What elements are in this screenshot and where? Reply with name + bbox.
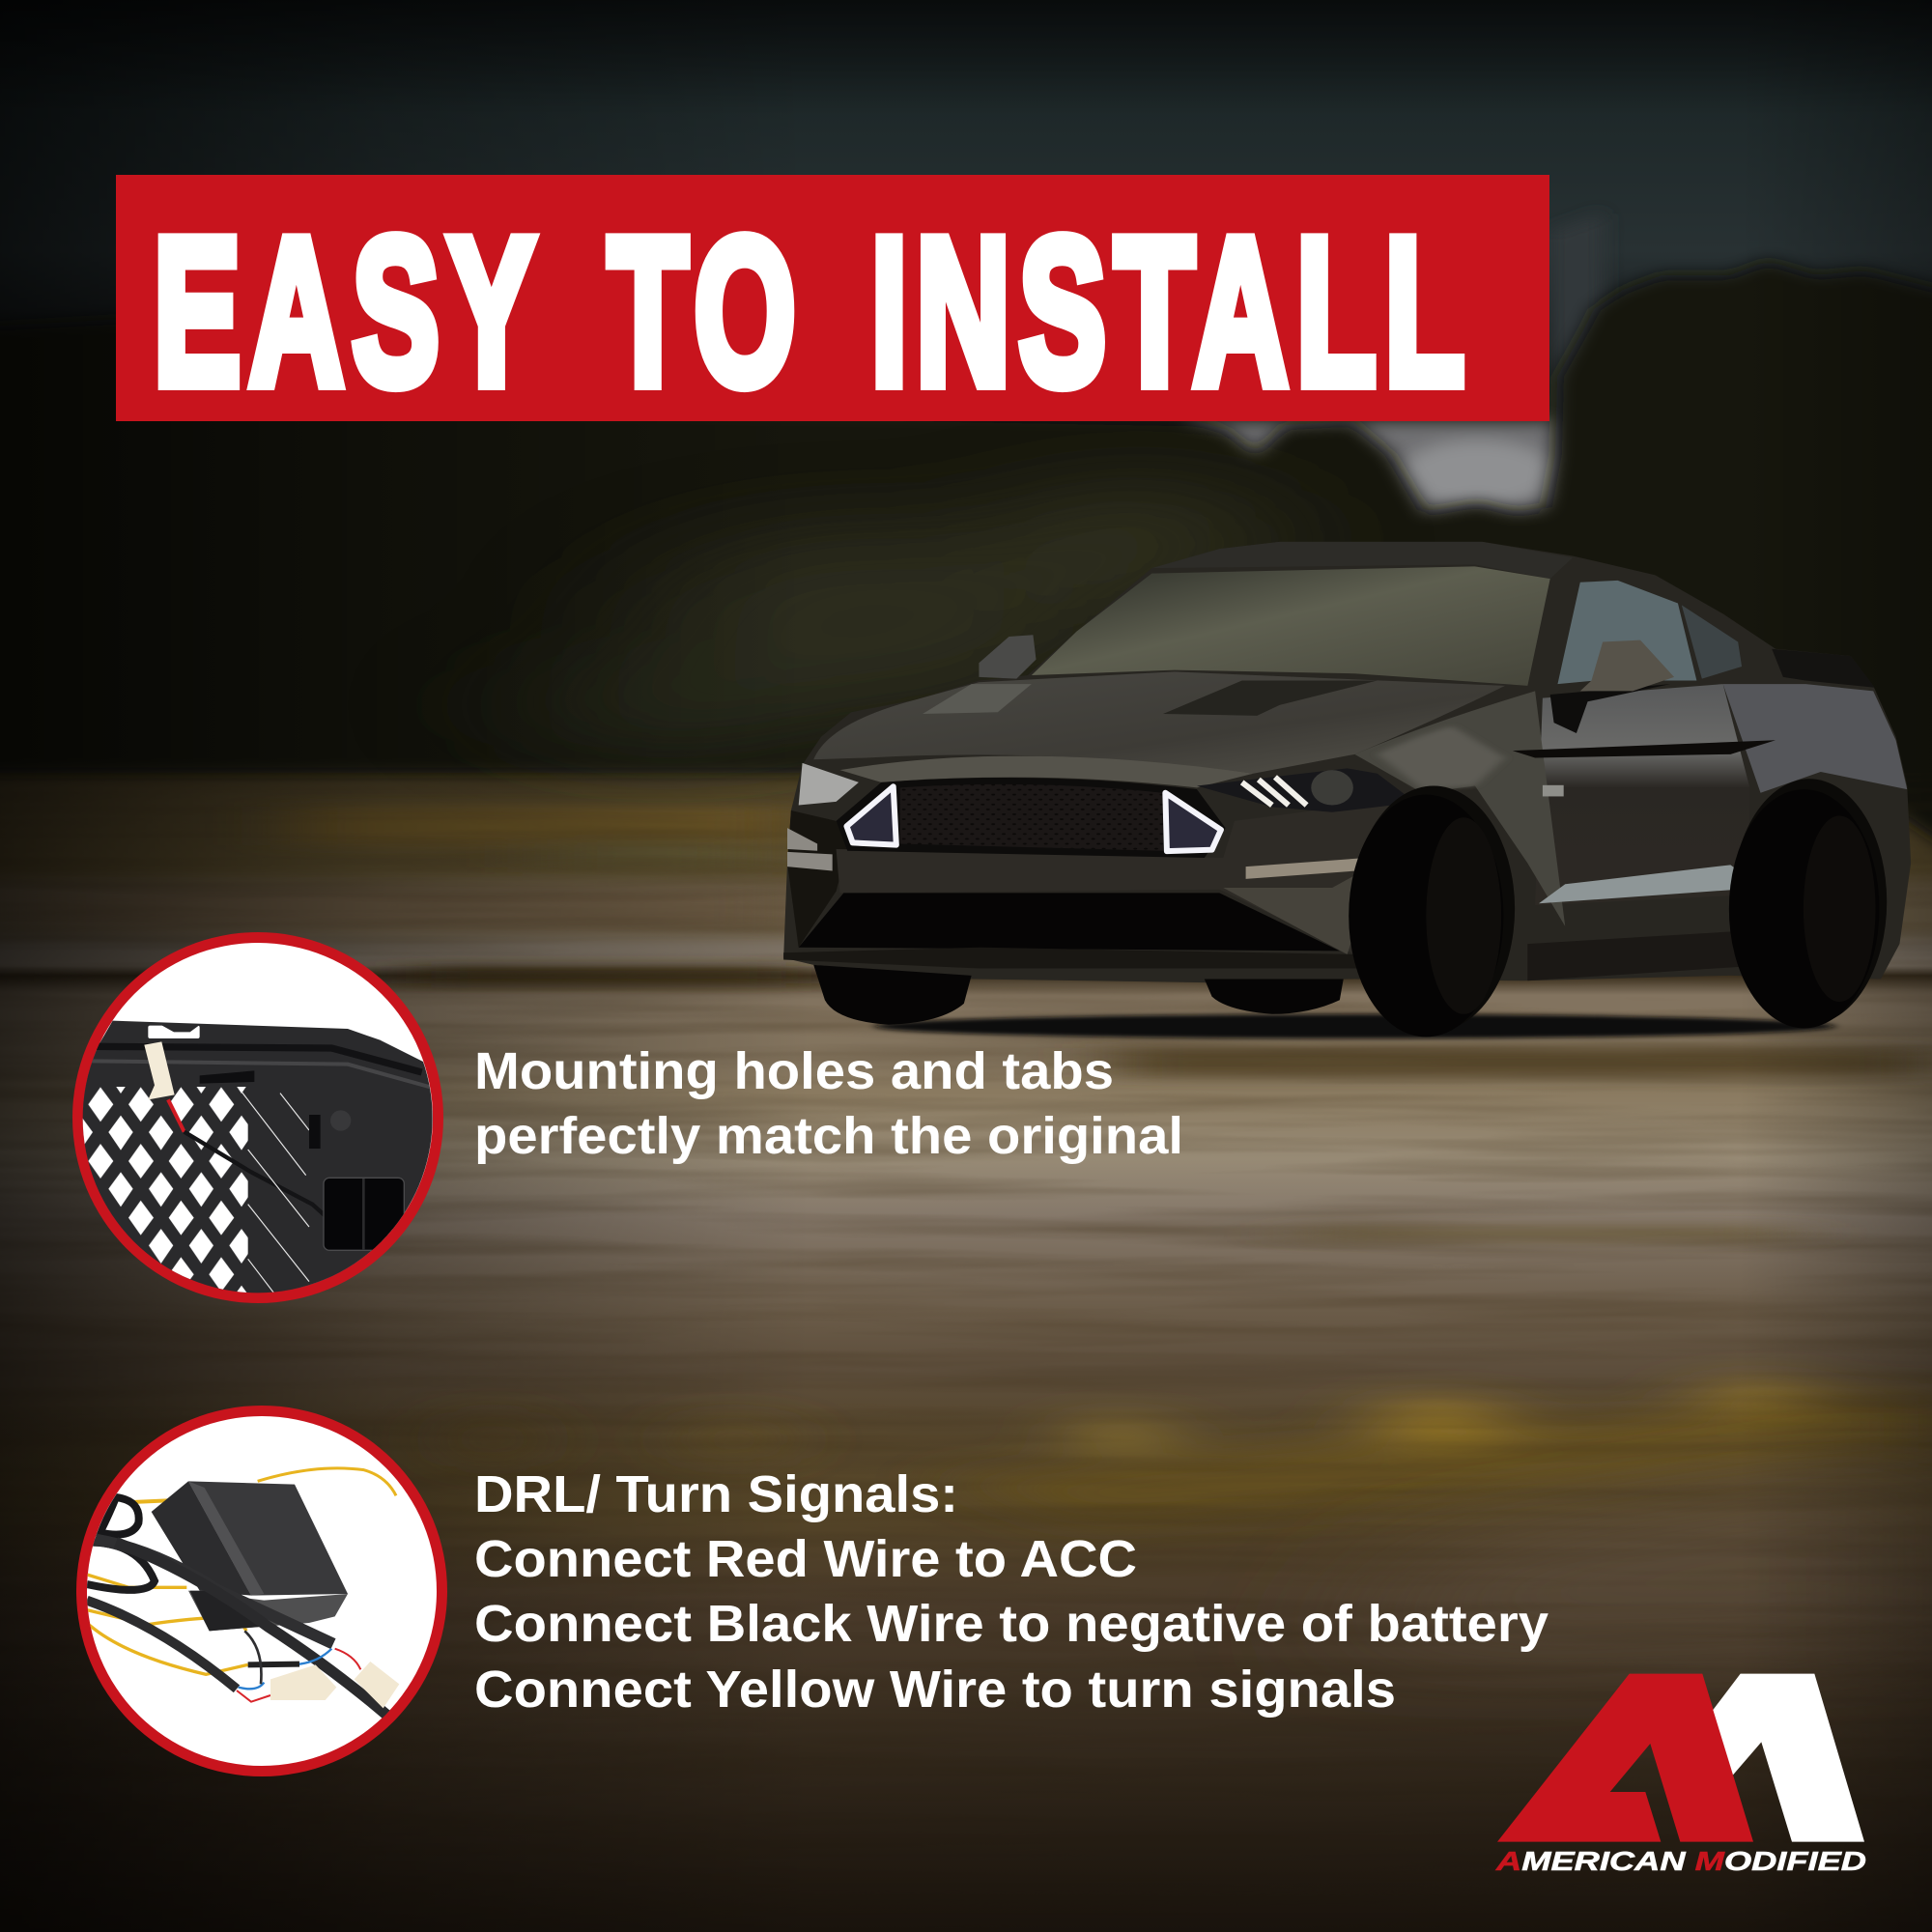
hood vents <box>1163 680 1378 716</box>
rocker <box>1527 930 1768 980</box>
rear wheel <box>1729 789 1879 1028</box>
front far wheel <box>1205 979 1344 1014</box>
feature 1: grille photo in red circle <box>72 932 444 1323</box>
grass and dirt patches <box>19 807 1932 1240</box>
splitter <box>783 948 1400 969</box>
nose panel <box>839 756 1253 787</box>
feature 2 caption <box>474 1465 1548 1719</box>
feature 1 caption: Mounting holes and tabs <box>474 1042 1114 1100</box>
fender highlight <box>1378 726 1505 789</box>
front wheel <box>1349 795 1503 1037</box>
left headlight <box>799 763 859 806</box>
pale dirt right <box>1352 1468 1932 1662</box>
logo: American Modified <box>1495 1674 1866 1876</box>
rear rim <box>1804 815 1876 1002</box>
feature 1 caption <box>474 1042 1183 1165</box>
body silhouette <box>783 542 1911 982</box>
side window front <box>1557 581 1696 684</box>
badge <box>1543 785 1564 796</box>
hood <box>813 671 1505 774</box>
grey sky behind trees <box>1188 213 1604 541</box>
right intake panel <box>1223 864 1378 954</box>
feature 1 caption: perfectly match the original <box>474 1107 1183 1165</box>
spoiler <box>1772 649 1875 688</box>
feature 2 caption: Connect Black Wire to negative of battery <box>474 1595 1548 1653</box>
side window rear <box>1682 605 1742 679</box>
windshield <box>1032 566 1550 686</box>
front rim <box>1426 817 1501 1014</box>
ground shadow <box>873 1014 1835 1038</box>
right mirror <box>1580 640 1674 691</box>
grille mesh <box>900 784 1163 851</box>
feature 2 caption: Connect Red Wire to ACC <box>474 1530 1137 1588</box>
left DRL <box>846 786 896 845</box>
right DRL <box>1165 793 1221 851</box>
door highlight <box>1539 865 1762 903</box>
left mirror <box>979 635 1037 679</box>
left side lights <box>787 828 833 870</box>
front left wheel <box>813 965 972 1025</box>
rear quarter panel <box>1723 684 1907 793</box>
mirror shadow <box>1550 684 1670 733</box>
fog lamp <box>1246 858 1366 879</box>
title text: EASY TO INSTALL <box>154 196 1473 429</box>
front wheel arch <box>1352 786 1515 1032</box>
left front cladding <box>787 810 847 948</box>
roof <box>1151 542 1573 579</box>
feature 2 caption: Connect Yellow Wire to turn signals <box>474 1661 1396 1719</box>
feature 2: wiring photo in red circle <box>76 1406 447 1776</box>
grille back photo <box>83 1020 433 1293</box>
blurred treeline <box>0 261 1932 869</box>
control box and wires photo <box>87 1468 399 1715</box>
lower intake <box>799 893 1340 951</box>
door panel <box>1535 684 1749 905</box>
rear wheel arch <box>1732 779 1887 1025</box>
yellow flower band <box>464 1382 1932 1526</box>
bumper <box>837 796 1422 954</box>
headlight lens <box>1311 770 1353 806</box>
car: dark Mustang with illuminated grille <box>783 542 1911 1038</box>
logo mark <box>1497 1674 1864 1842</box>
lighter foliage patches <box>522 483 1256 753</box>
feature 2 caption: DRL/ Turn Signals: <box>474 1465 958 1523</box>
logo wordmark: AMERICAN MODIFIED <box>1495 1846 1866 1876</box>
title banner <box>116 175 1549 429</box>
headlight bars <box>1242 777 1307 806</box>
right headlight <box>1197 768 1407 812</box>
front fender <box>1354 691 1565 926</box>
door crease <box>1513 740 1776 757</box>
grille <box>837 778 1226 858</box>
